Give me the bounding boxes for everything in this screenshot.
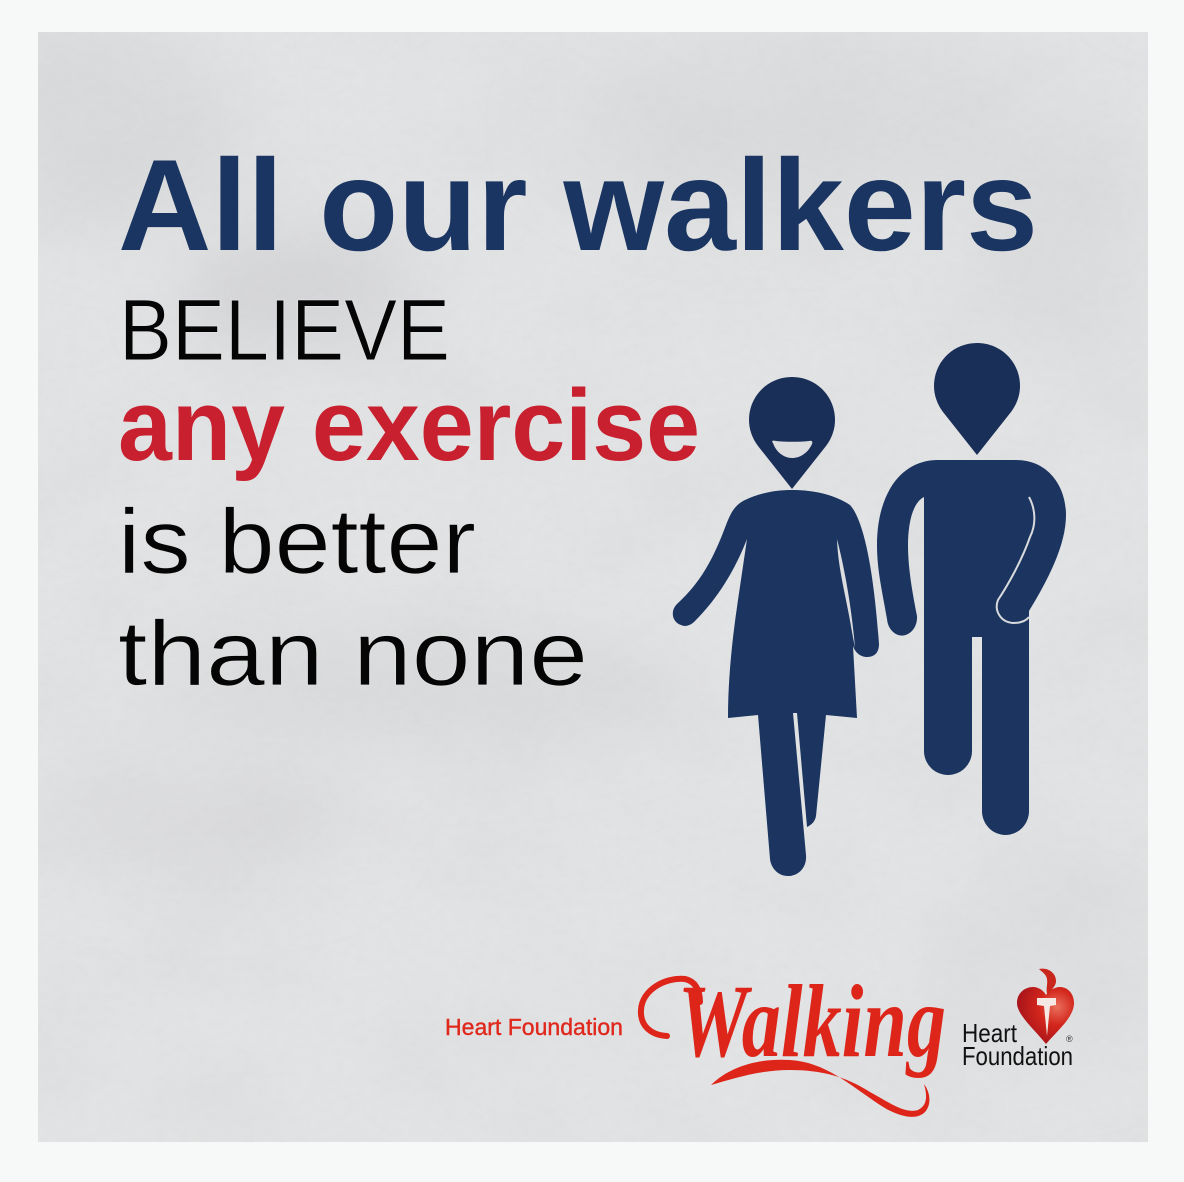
woman arm gap	[837, 539, 855, 648]
torch	[1037, 998, 1056, 1036]
flame	[1039, 969, 1056, 996]
woman body	[673, 490, 879, 876]
shoelace underline	[711, 1060, 929, 1117]
logo text: Heart: Heart	[962, 1018, 1018, 1048]
woman head	[749, 377, 835, 489]
man head	[934, 343, 1020, 455]
logo: Heart Foundation	[962, 969, 1074, 1071]
icon: walking man	[877, 343, 1066, 835]
swash of W	[641, 979, 700, 1036]
heart symbol	[1017, 987, 1074, 1044]
script word: Walking: Walking	[678, 964, 946, 1079]
text: Heart Foundation: Heart Foundation	[445, 1014, 623, 1040]
woman smile	[772, 441, 812, 458]
man body	[877, 460, 1066, 835]
icon: walking woman smiling	[673, 377, 879, 876]
heading: All our walkers: All our walkers	[118, 132, 1038, 278]
logo text: Foundation: Foundation	[962, 1041, 1073, 1071]
registered mark: ®	[1066, 1034, 1073, 1044]
text: than none: than none	[118, 603, 588, 705]
text: any exercise: any exercise	[118, 370, 700, 482]
logo: Heart Foundation Walking	[445, 964, 946, 1117]
text: BELIEVE: BELIEVE	[119, 282, 450, 379]
text: is better: is better	[118, 491, 476, 593]
man arm outline	[997, 497, 1034, 623]
